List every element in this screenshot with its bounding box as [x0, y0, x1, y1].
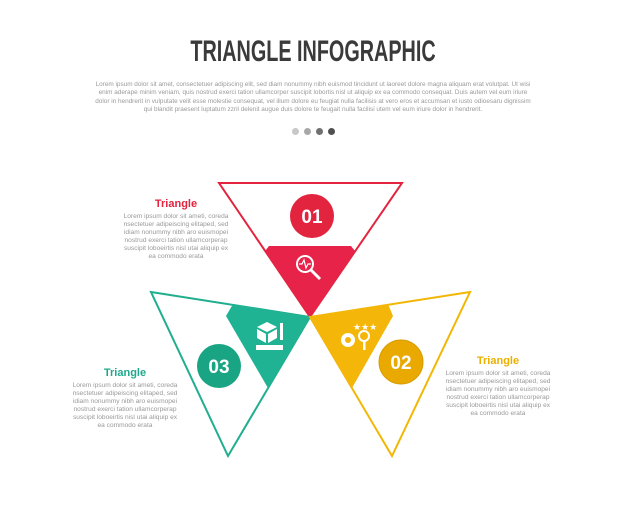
- triangle 02 yellow: 02: [390, 353, 412, 374]
- pagination dots: [292, 128, 335, 135]
- text block: yellow triangle: Triangle: [477, 355, 519, 367]
- text block: red triangle: Lorem ipsum dolor sit ameti, coreda nsectetuer adipeiscing elitaped, sed idiam nonummy nibh aro euismopei nostrud exerci tation ullamcorperap suscipit loboeirtis nisl utai aliquip ex ea commodo erata: [124, 213, 228, 260]
- title: TRIANGLE INFOGRAPHIC: [190, 35, 436, 68]
- intro paragraph: Lorem ipsum dolor sit amet, consectetuer adipiscing elit, sed diam nonummy nibh euismod tincidunt ut laoreet dolore magna aliquam erat volutpat. Ut wisi enim aderape minim veniam, quis nostrud exerci tation ullamcorper suscipit lobortis nisl ut aliquip ex ea commodo consequat. Duis autem vel eum iriure dolor in hendrerit in vulputate velit esse molestie consequat, vel illum dolore eu feugiat nulla facilisis at vero eros et accumsan et iusto odioesaru dignissim qui blandit praesent luptatum zzril delenit augue duis dolore te feugait nulla facilisi utem vel eum iriure dolor in hendrerit.: [95, 81, 531, 113]
- icon: magnifier: [297, 256, 320, 279]
- triangle 03 teal: [151, 292, 310, 456]
- icon: cube and ruler: [256, 322, 283, 350]
- text block: teal triangle: Lorem ipsum dolor sit ameti, coreda nsectetuer adipeiscing elitaped, sed idiam nonummy nibh aro euismopei nostrud exerci tation ullamcorperap suscipit loboeirtis nisl utai aliquip ex ea commodo erata: [73, 382, 177, 429]
- text block: teal triangle: Triangle: [104, 367, 146, 379]
- text block: yellow triangle: Lorem ipsum dolor sit ameti, coreda nsectetuer adipeiscing elitaped, sed idiam nonummy nibh aro euismopei nostrud exerci tation ullamcorperap suscipit loboeirtis nisl utai aliquip ex ea commodo erata: [446, 370, 550, 417]
- triangle 01 red: [219, 183, 402, 317]
- icon: gears and stars: ★★★: [353, 322, 377, 332]
- triangle 02 yellow: [310, 292, 470, 456]
- text block: red triangle: Triangle: [155, 198, 197, 210]
- triangle 03 teal: 03: [208, 357, 230, 378]
- triangle 01 red: 01: [301, 207, 323, 228]
- icon: gears and stars: [341, 322, 377, 350]
